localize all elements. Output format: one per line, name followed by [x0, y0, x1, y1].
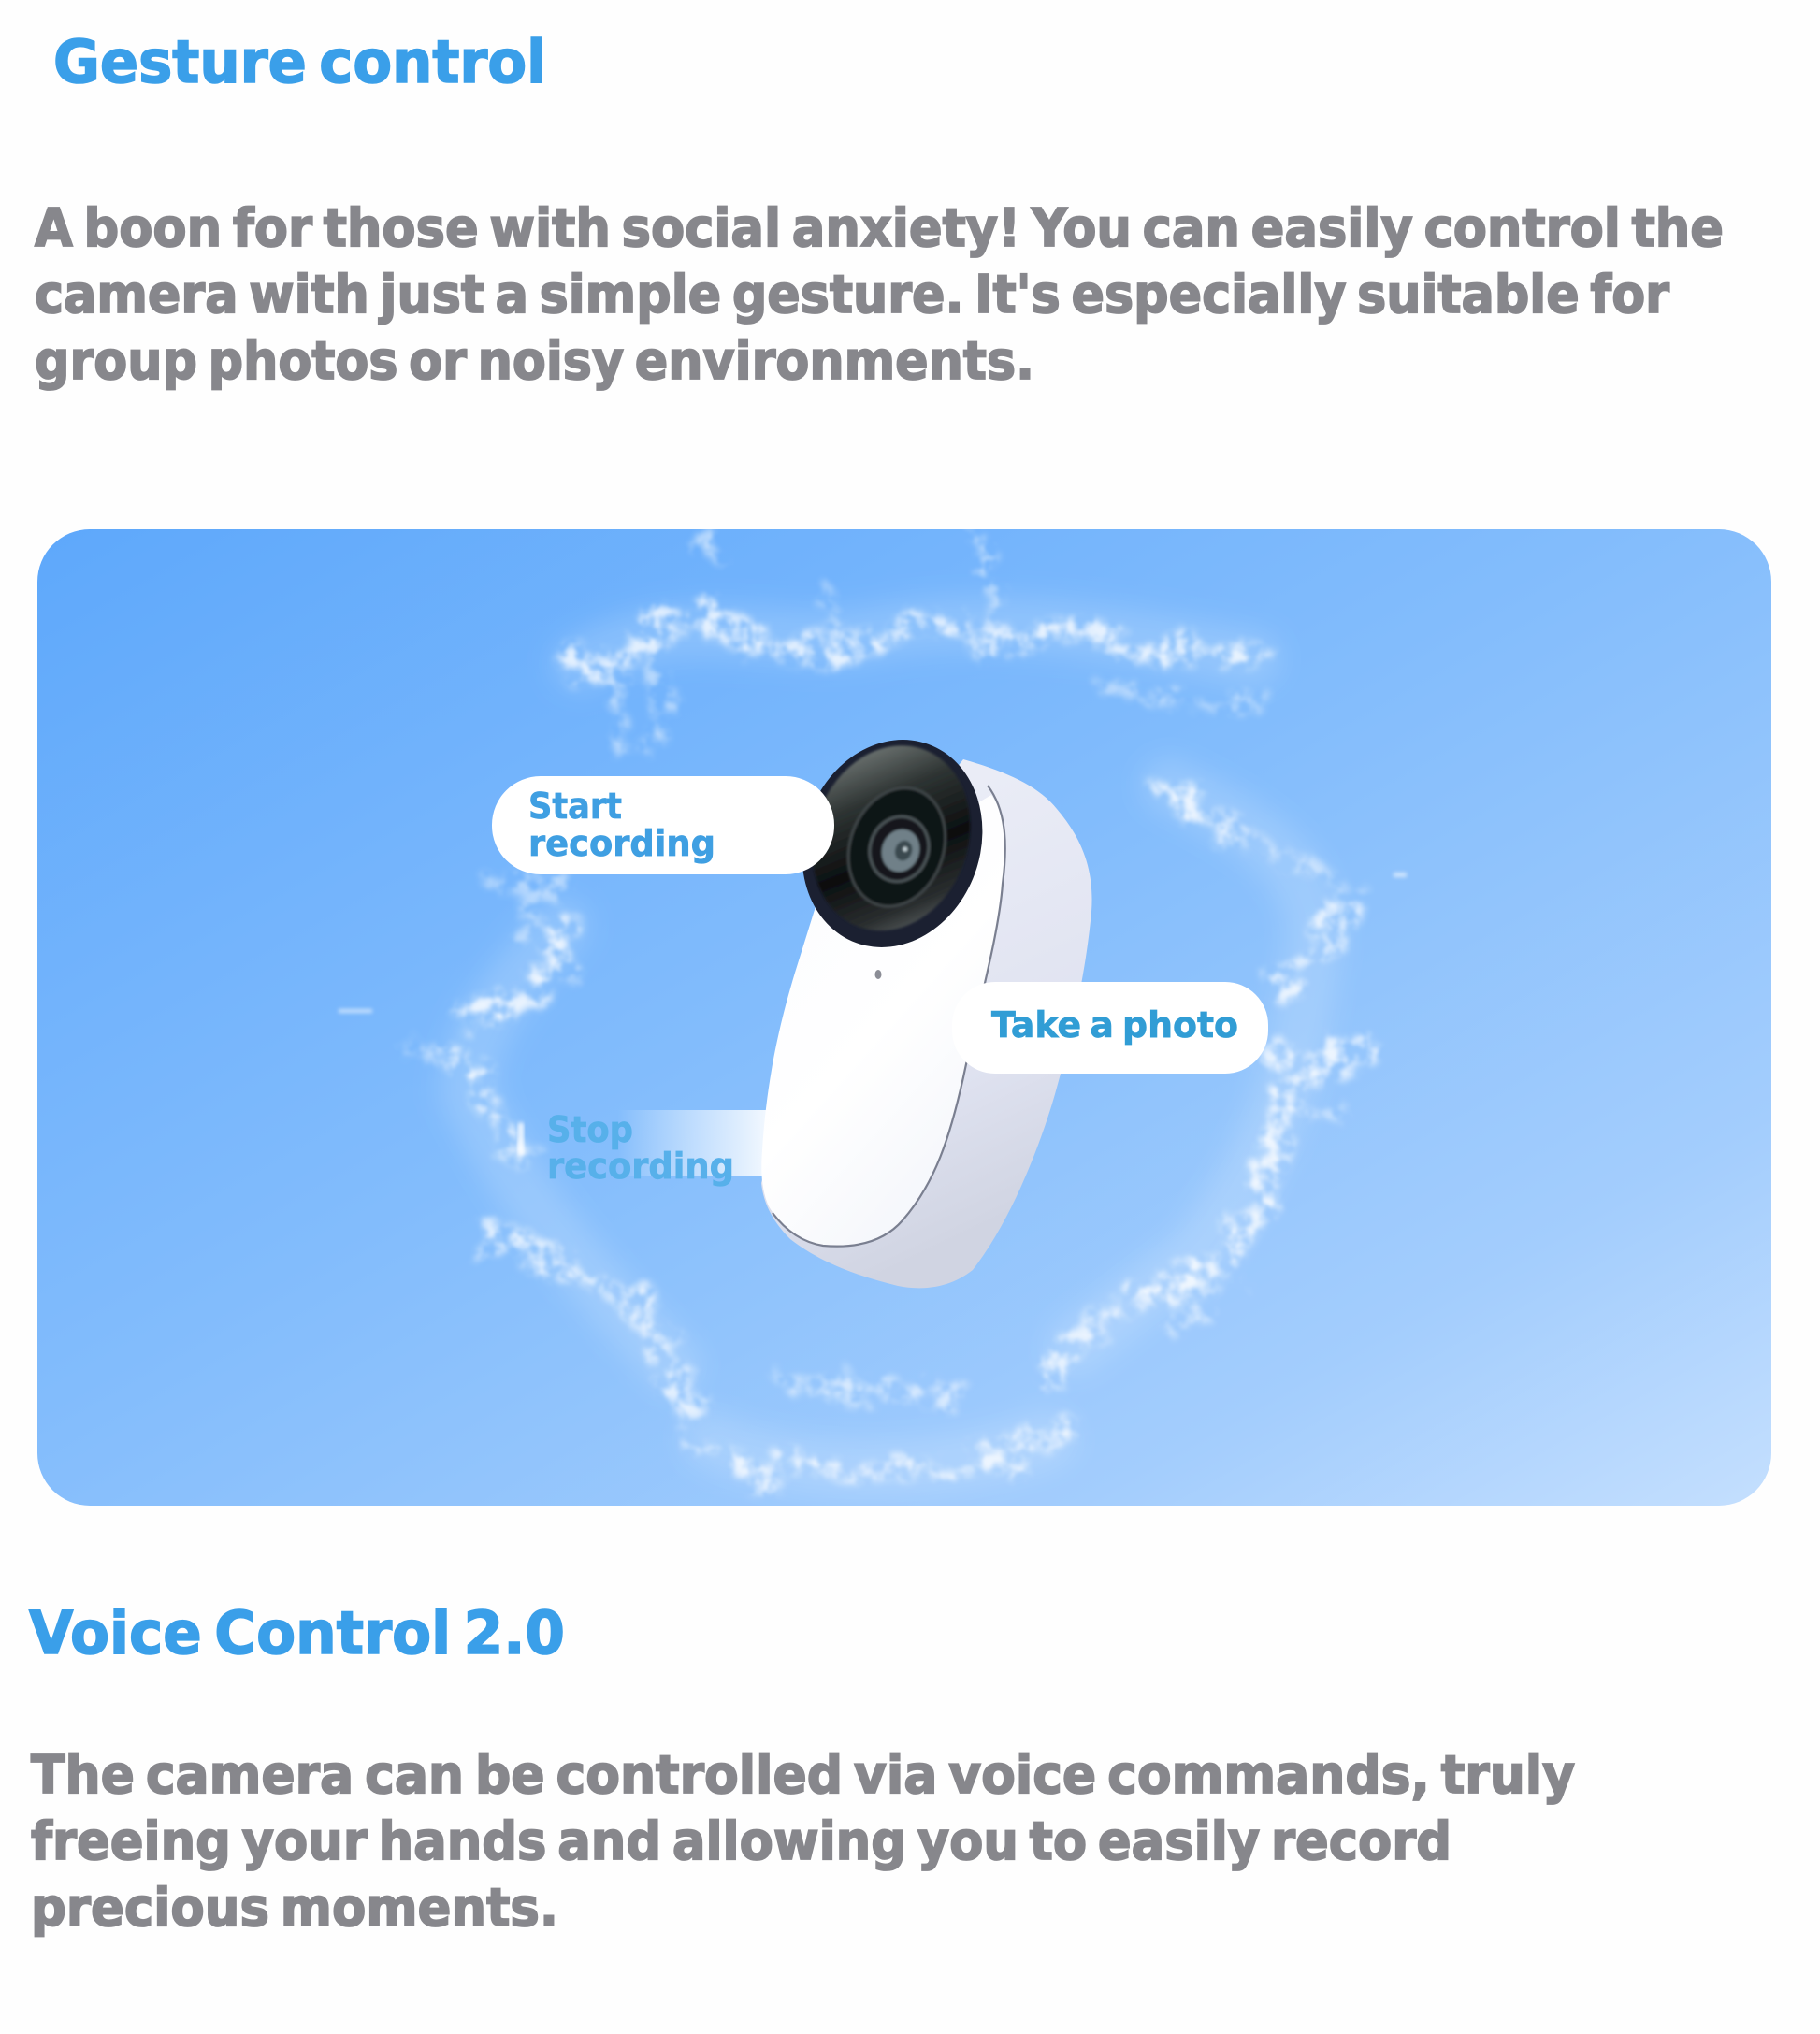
heading: Gesture control: Gesture control — [53, 28, 546, 96]
camera seam line — [773, 786, 1005, 1247]
callout: Take a photo — [952, 982, 1268, 1074]
icon: action camera — [761, 714, 1092, 1288]
callout: Start recording: Start — [528, 786, 622, 827]
camera body front face — [761, 795, 1005, 1247]
camera lens — [773, 714, 1011, 973]
camera body side — [761, 759, 1092, 1288]
stop recording faded bar — [518, 1110, 776, 1176]
panel: sky photo with camera — [37, 529, 1771, 1506]
small cloud streaks — [339, 873, 1407, 1013]
callout: Start recording — [492, 776, 834, 874]
heading: Voice Control 2.0: Voice Control 2.0 — [29, 1599, 565, 1667]
callout: Take a photo: Take a photo — [991, 1004, 1238, 1046]
text block: voice control description — [31, 1745, 1575, 1939]
callout: Stop recording: Stop — [547, 1109, 633, 1150]
text block: voice control description: freeing your hands and allowing you to easily record — [31, 1811, 1452, 1872]
callout: Start recording: recording — [528, 823, 715, 864]
sky background — [37, 529, 1771, 1506]
text block: gesture control description: camera with just a simple gesture. It's especially suitable for — [35, 265, 1669, 325]
callout: Stop recording — [547, 1109, 734, 1187]
text block: gesture control description — [35, 198, 1724, 392]
cloud ring — [339, 533, 1407, 1482]
text block: voice control description: The camera can be controlled via voice commands, truly — [31, 1745, 1575, 1806]
text block: voice control description: precious moments. — [31, 1878, 558, 1939]
callout: Stop recording: recording — [547, 1146, 734, 1187]
text block: gesture control description: group photos or noisy environments. — [35, 331, 1034, 392]
camera microphone dot — [875, 970, 881, 979]
text block: gesture control description: A boon for those with social anxiety! You can easily control the — [35, 198, 1724, 259]
